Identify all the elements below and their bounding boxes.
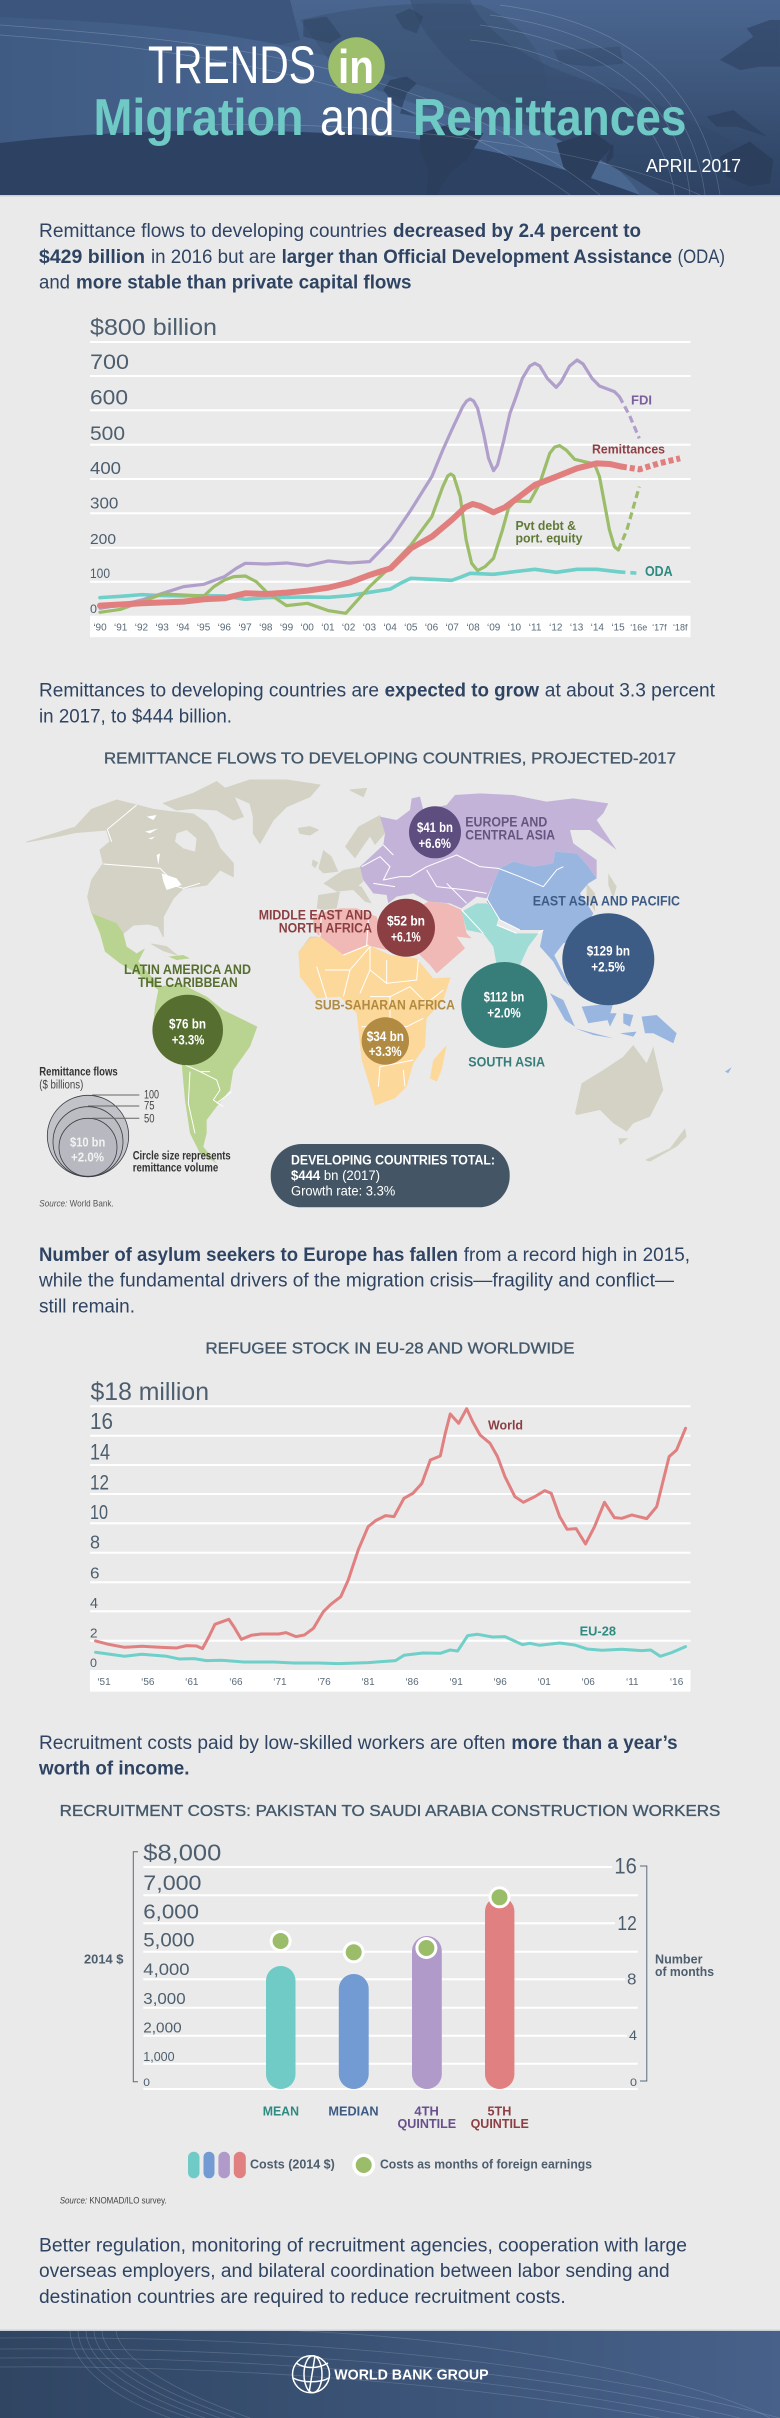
right axis labels: 0 bbox=[630, 2077, 637, 2089]
title: TRENDS bbox=[148, 36, 316, 95]
x axis labels: ‘76 bbox=[317, 1677, 331, 1688]
legend: circle size: Circle size represents bbox=[133, 1151, 231, 1163]
text: remittances growth: Remittances to developing countries are bbox=[39, 681, 379, 702]
series labels bbox=[488, 1417, 616, 1638]
borders and lakes bbox=[103, 805, 200, 888]
bubble: Latin America and the Caribbean: $76 bn bbox=[169, 1015, 206, 1031]
line: ODA bbox=[100, 569, 639, 599]
callout: developing countries total: $444 bn (2017) bbox=[291, 1168, 380, 1183]
text: remittances growth bbox=[39, 681, 716, 728]
x axis labels: ‘01 bbox=[538, 1677, 551, 1688]
y axis labels: 200 bbox=[90, 531, 116, 548]
label: Latin America and the Caribbean bbox=[124, 962, 251, 990]
intro text: (ODA) bbox=[678, 247, 725, 268]
category labels: QUINTILE bbox=[398, 2116, 457, 2131]
heading: recruitment costs: RECRUITMENT COSTS: PAKISTAN TO SAUDI ARABIA CONSTRUCTION WORKERS bbox=[60, 1803, 720, 1820]
title bbox=[94, 36, 686, 147]
text: recruitment costs: Recruitment costs paid by low-skilled workers are often bbox=[39, 1733, 505, 1754]
series labels: FDI bbox=[631, 392, 652, 408]
category labels bbox=[263, 2103, 529, 2131]
Middle East and North Africa region bbox=[313, 902, 472, 973]
y axis labels: 400 bbox=[90, 458, 121, 478]
text: remittances growth: at about 3.3 percent bbox=[545, 681, 716, 702]
text: asylum seekers: Number of asylum seekers to Europe has fallen bbox=[39, 1245, 458, 1266]
data lines bbox=[96, 1409, 686, 1664]
legend: costs: Costs as months of foreign earnings bbox=[380, 2156, 592, 2171]
y axis labels: 12 bbox=[90, 1471, 109, 1494]
bar chart: recruitment costs bbox=[84, 1840, 714, 2131]
intro text: in 2016 but are bbox=[151, 247, 276, 268]
North America bbox=[27, 780, 367, 955]
x axis labels: ‘56 bbox=[141, 1677, 155, 1688]
label: East Asia and Pacific: EAST ASIA AND PACIFIC bbox=[533, 894, 680, 909]
bubble: South Asia: +2.0% bbox=[487, 1005, 521, 1021]
x axis labels: ‘02 bbox=[342, 623, 356, 634]
category labels: 5TH bbox=[488, 2103, 511, 2118]
x axis labels: ‘17f bbox=[652, 623, 667, 633]
left axis labels: 0 bbox=[143, 2077, 150, 2089]
line chart: refugee stock bbox=[90, 1378, 690, 1692]
left axis labels: $8,000 bbox=[143, 1840, 221, 1866]
intro text: $429 billion bbox=[39, 247, 145, 268]
right axis labels: 8 bbox=[627, 1972, 637, 1989]
right axis labels bbox=[614, 1854, 637, 2089]
series labels: Pvt debt & bbox=[516, 518, 576, 533]
icon: in badge bbox=[328, 37, 385, 94]
y axis labels bbox=[90, 1378, 209, 1670]
category labels: MEDIAN bbox=[328, 2103, 379, 2118]
label: Europe and Central Asia: CENTRAL ASIA bbox=[465, 827, 555, 842]
text: remittances growth: expected to grow bbox=[385, 681, 539, 702]
Latin America bbox=[92, 913, 257, 1163]
intro text bbox=[39, 221, 725, 294]
line chart: capital flows bbox=[90, 314, 690, 637]
legend: circle size: 75 bbox=[144, 1101, 154, 1113]
label: South Asia: SOUTH ASIA bbox=[468, 1055, 545, 1070]
text: recruitment costs: worth of income. bbox=[38, 1758, 189, 1779]
x axis labels: ‘07 bbox=[446, 623, 459, 634]
x axis labels: ‘04 bbox=[383, 623, 397, 634]
bubble: South Asia bbox=[461, 962, 547, 1048]
y axis labels: 16 bbox=[90, 1408, 113, 1434]
left axis labels: 5,000 bbox=[143, 1931, 194, 1952]
bar: median bbox=[339, 1941, 369, 2089]
axis titles: of months bbox=[655, 1965, 714, 1979]
South Asia region bbox=[462, 903, 538, 965]
bubble: Middle East and North Africa: +6.1% bbox=[391, 929, 421, 945]
bubble: Sub-Saharan Africa: $34 bn bbox=[367, 1028, 404, 1044]
legend: circle size: 50 bbox=[144, 1114, 154, 1126]
legend: circle size: 100 bbox=[144, 1089, 159, 1101]
series labels: Remittances bbox=[592, 442, 665, 457]
label: Middle East and North Africa: NORTH AFRICA bbox=[279, 921, 372, 936]
category labels: 4TH bbox=[414, 2103, 439, 2118]
x axis labels: ‘06 bbox=[425, 623, 439, 634]
text: asylum seekers: while the fundamental drivers of the migration crisis—fragility and conflict— bbox=[38, 1271, 674, 1292]
x axis labels: ‘91 bbox=[449, 1677, 463, 1688]
title: Remittances bbox=[413, 89, 686, 147]
line: private debt and portfolio equity bbox=[100, 446, 639, 613]
x axis labels: ‘08 bbox=[466, 623, 480, 634]
label: Latin America and the Caribbean: THE CARIBBEAN bbox=[138, 975, 238, 990]
x axis labels: ‘93 bbox=[156, 623, 169, 634]
x axis labels: ‘11 bbox=[529, 623, 542, 634]
series labels: port. equity bbox=[516, 531, 583, 546]
bubble: Middle East and North Africa: $52 bn bbox=[387, 912, 425, 928]
label: Middle East and North Africa bbox=[259, 907, 372, 936]
intro text: decreased by 2.4 percent to bbox=[393, 221, 641, 242]
title: and bbox=[320, 89, 394, 147]
y axis labels: 2 bbox=[90, 1625, 98, 1640]
right axis labels: 16 bbox=[614, 1854, 637, 1879]
footer bbox=[0, 2330, 780, 2418]
intro text: and bbox=[39, 272, 70, 294]
bubble: Europe and Central Asia bbox=[409, 806, 461, 858]
category labels: MEAN bbox=[263, 2103, 299, 2118]
x axis labels: ‘92 bbox=[135, 623, 149, 634]
series labels bbox=[516, 392, 673, 580]
x axis labels bbox=[93, 623, 688, 634]
legend: costs: Costs (2014 $) bbox=[250, 2156, 335, 2171]
legend: circle size: remittance volume bbox=[133, 1163, 218, 1175]
bubble: Latin America and the Caribbean bbox=[152, 995, 223, 1065]
label: Sub-Saharan Africa: SUB-SAHARAN AFRICA bbox=[315, 997, 455, 1012]
x axis labels: ‘12 bbox=[549, 623, 563, 634]
x axis labels: ‘18f bbox=[673, 623, 688, 633]
y axis labels: 0 bbox=[90, 602, 97, 616]
left axis labels: 7,000 bbox=[143, 1872, 202, 1895]
data lines bbox=[100, 360, 680, 613]
category labels: QUINTILE bbox=[471, 2116, 529, 2131]
Sub-Saharan Africa region bbox=[298, 937, 451, 1106]
legend: costs bbox=[188, 2152, 592, 2178]
text: closing paragraph: Better regulation, monitoring of recruitment agencies, cooperation with large bbox=[39, 2235, 687, 2256]
x axis labels: ‘96 bbox=[493, 1677, 507, 1688]
nested circles bbox=[47, 1095, 139, 1177]
text: closing paragraph: destination countries are required to reduce recruitment costs. bbox=[39, 2287, 566, 2308]
text: asylum seekers: still remain. bbox=[39, 1297, 135, 1318]
axis titles: Number bbox=[655, 1952, 703, 1966]
bubble: Sub-Saharan Africa bbox=[362, 1017, 409, 1065]
x axis labels: ‘01 bbox=[321, 623, 335, 634]
bar: mean bbox=[266, 1930, 296, 2089]
text: asylum seekers bbox=[38, 1245, 690, 1318]
header banner bbox=[0, 0, 780, 195]
x axis labels: ‘94 bbox=[176, 623, 190, 634]
bubble: East Asia and Pacific: +2.5% bbox=[591, 959, 625, 975]
x axis labels: ‘61 bbox=[185, 1677, 199, 1688]
y axis labels: 8 bbox=[90, 1532, 100, 1552]
legend: circle size: ($ billions) bbox=[39, 1079, 83, 1091]
label: Europe and Central Asia bbox=[465, 815, 555, 842]
x axis labels: ‘13 bbox=[570, 623, 584, 634]
y axis labels: 700 bbox=[90, 351, 129, 374]
y axis labels: 500 bbox=[90, 424, 125, 445]
bubble: Europe and Central Asia: $41 bn bbox=[417, 819, 453, 835]
x axis labels: ‘99 bbox=[280, 623, 294, 634]
text: recruitment costs bbox=[38, 1733, 678, 1779]
y axis labels: $18 million bbox=[90, 1378, 209, 1406]
bubble: East Asia and Pacific: $129 bn bbox=[587, 942, 630, 958]
x axis labels: ‘14 bbox=[591, 623, 604, 634]
x axis labels: ‘09 bbox=[487, 623, 501, 634]
right axis labels: 4 bbox=[629, 2027, 637, 2043]
y axis labels: 100 bbox=[90, 566, 110, 581]
bubble: South Asia: $112 bn bbox=[484, 989, 524, 1005]
line: FDI bbox=[100, 360, 639, 608]
legend: circle size: $10 bn bbox=[70, 1135, 105, 1150]
y axis labels: 14 bbox=[90, 1439, 110, 1464]
left axis labels: 4,000 bbox=[143, 1960, 190, 1979]
label: Middle East and North Africa: MIDDLE EAST AND bbox=[259, 907, 372, 922]
legend: circle size bbox=[39, 1067, 231, 1177]
series labels: ODA bbox=[645, 563, 673, 580]
Hudson Bay bbox=[175, 830, 197, 852]
heading: refugee stock: REFUGEE STOCK IN EU-28 AND WORLDWIDE bbox=[206, 1340, 574, 1357]
country borders bbox=[317, 845, 563, 1087]
left axis labels: 3,000 bbox=[143, 1991, 186, 2008]
intro text: Remittance flows to developing countries bbox=[39, 221, 387, 242]
icon: in badge: in bbox=[338, 40, 374, 93]
logo: World Bank Group: WORLD BANK GROUP bbox=[334, 2366, 489, 2383]
text: asylum seekers: from a record high in 2015, bbox=[464, 1245, 690, 1266]
callout: developing countries total: Growth rate: 3.3% bbox=[291, 1183, 395, 1198]
date: APRIL 2017 bbox=[646, 156, 741, 176]
x axis labels: ‘96 bbox=[218, 623, 231, 634]
y axis labels: 600 bbox=[90, 387, 128, 410]
y axis labels: 300 bbox=[90, 496, 118, 513]
x axis labels: ‘06 bbox=[582, 1677, 595, 1688]
logo: World Bank Group bbox=[292, 2356, 489, 2393]
text: closing paragraph bbox=[39, 2235, 687, 2308]
x axis labels: ‘66 bbox=[229, 1677, 243, 1688]
x axis labels: ‘71 bbox=[273, 1677, 287, 1688]
line: EU-28 bbox=[96, 1634, 686, 1664]
source: KNOMAD: Source: KNOMAD/ILO survey. bbox=[60, 2195, 167, 2206]
right axis labels: 12 bbox=[617, 1913, 637, 1935]
x axis labels: ‘90 bbox=[93, 623, 107, 634]
map: Eastern hemisphere bbox=[298, 793, 732, 1162]
axis titles bbox=[84, 1952, 714, 1979]
legend: circle size: +2.0% bbox=[71, 1149, 104, 1164]
world map bbox=[27, 780, 732, 1163]
bar: 5th quintile bbox=[485, 1886, 514, 2089]
heading: remittance map: REMITTANCE FLOWS TO DEVELOPING COUNTRIES, PROJECTED-2017 bbox=[104, 750, 676, 767]
icon: globe bbox=[292, 2356, 330, 2393]
y axis labels: 10 bbox=[90, 1502, 108, 1524]
bubble: Europe and Central Asia: +6.6% bbox=[418, 835, 451, 851]
x axis labels: ‘98 bbox=[259, 623, 273, 634]
bubble: Middle East and North Africa bbox=[377, 899, 435, 957]
title: Migration bbox=[94, 89, 304, 147]
bar: 4th quintile bbox=[412, 1936, 442, 2089]
x axis labels bbox=[97, 1677, 684, 1688]
label: Europe and Central Asia: EUROPE AND bbox=[465, 815, 548, 830]
text: remittances growth: in 2017, to $444 billion. bbox=[39, 707, 232, 728]
x axis labels: ‘11 bbox=[626, 1677, 639, 1688]
Europe, Japan and Oceania bbox=[298, 815, 687, 1162]
x axis labels: ‘16e bbox=[630, 623, 647, 633]
callout: developing countries total bbox=[271, 1144, 510, 1207]
x axis labels: ‘91 bbox=[114, 623, 128, 634]
y axis labels: 0 bbox=[90, 1656, 97, 1670]
bubble: Latin America and the Caribbean: +3.3% bbox=[172, 1031, 205, 1047]
text: closing paragraph: overseas employers, and bilateral coordination between labor sending and bbox=[39, 2261, 670, 2282]
series labels: EU-28 bbox=[580, 1623, 616, 1638]
line: World bbox=[96, 1409, 686, 1649]
y axis labels: 6 bbox=[90, 1565, 100, 1582]
x axis labels: ‘86 bbox=[405, 1677, 419, 1688]
source: World Bank: Source: World Bank. bbox=[39, 1199, 114, 1210]
text: recruitment costs: more than a year’s bbox=[511, 1733, 678, 1754]
x axis labels: ‘97 bbox=[238, 623, 252, 634]
x axis labels: ‘03 bbox=[363, 623, 377, 634]
East Asia and Pacific region bbox=[487, 852, 732, 1073]
label: Latin America and the Caribbean: LATIN AMERICA AND bbox=[124, 962, 251, 977]
y axis labels: $800 billion bbox=[90, 314, 217, 340]
x axis labels: ‘81 bbox=[361, 1677, 375, 1688]
callout: developing countries total: DEVELOPING COUNTRIES TOTAL: bbox=[291, 1152, 495, 1167]
left axis labels: 2,000 bbox=[143, 2020, 182, 2036]
bubble: East Asia and Pacific bbox=[562, 913, 654, 1005]
x axis labels: ‘10 bbox=[508, 623, 522, 634]
left axis labels: 1,000 bbox=[143, 2049, 175, 2064]
bubble: Sub-Saharan Africa: +3.3% bbox=[369, 1043, 402, 1059]
map: Americas bbox=[27, 780, 367, 1163]
left axis labels: 6,000 bbox=[143, 1902, 199, 1924]
x axis labels: ‘05 bbox=[404, 623, 418, 634]
intro text: more stable than private capital flows bbox=[76, 272, 412, 294]
y axis labels: 4 bbox=[90, 1595, 98, 1612]
legend: circle size: Remittance flows bbox=[39, 1067, 118, 1079]
y axis labels bbox=[90, 314, 217, 616]
x axis labels: ‘00 bbox=[301, 623, 314, 634]
x axis labels: ‘16 bbox=[670, 1677, 684, 1688]
x axis labels: ‘15 bbox=[611, 623, 625, 634]
Europe and Central Asia region bbox=[360, 793, 617, 908]
series labels: World bbox=[488, 1417, 523, 1432]
axis titles: 2014 $ bbox=[84, 1952, 123, 1966]
x axis labels: ‘95 bbox=[197, 623, 211, 634]
x axis labels: ‘51 bbox=[97, 1677, 111, 1688]
intro text: larger than Official Development Assistance bbox=[282, 247, 672, 268]
line: remittances bbox=[100, 458, 680, 606]
left axis labels bbox=[143, 1840, 221, 2089]
